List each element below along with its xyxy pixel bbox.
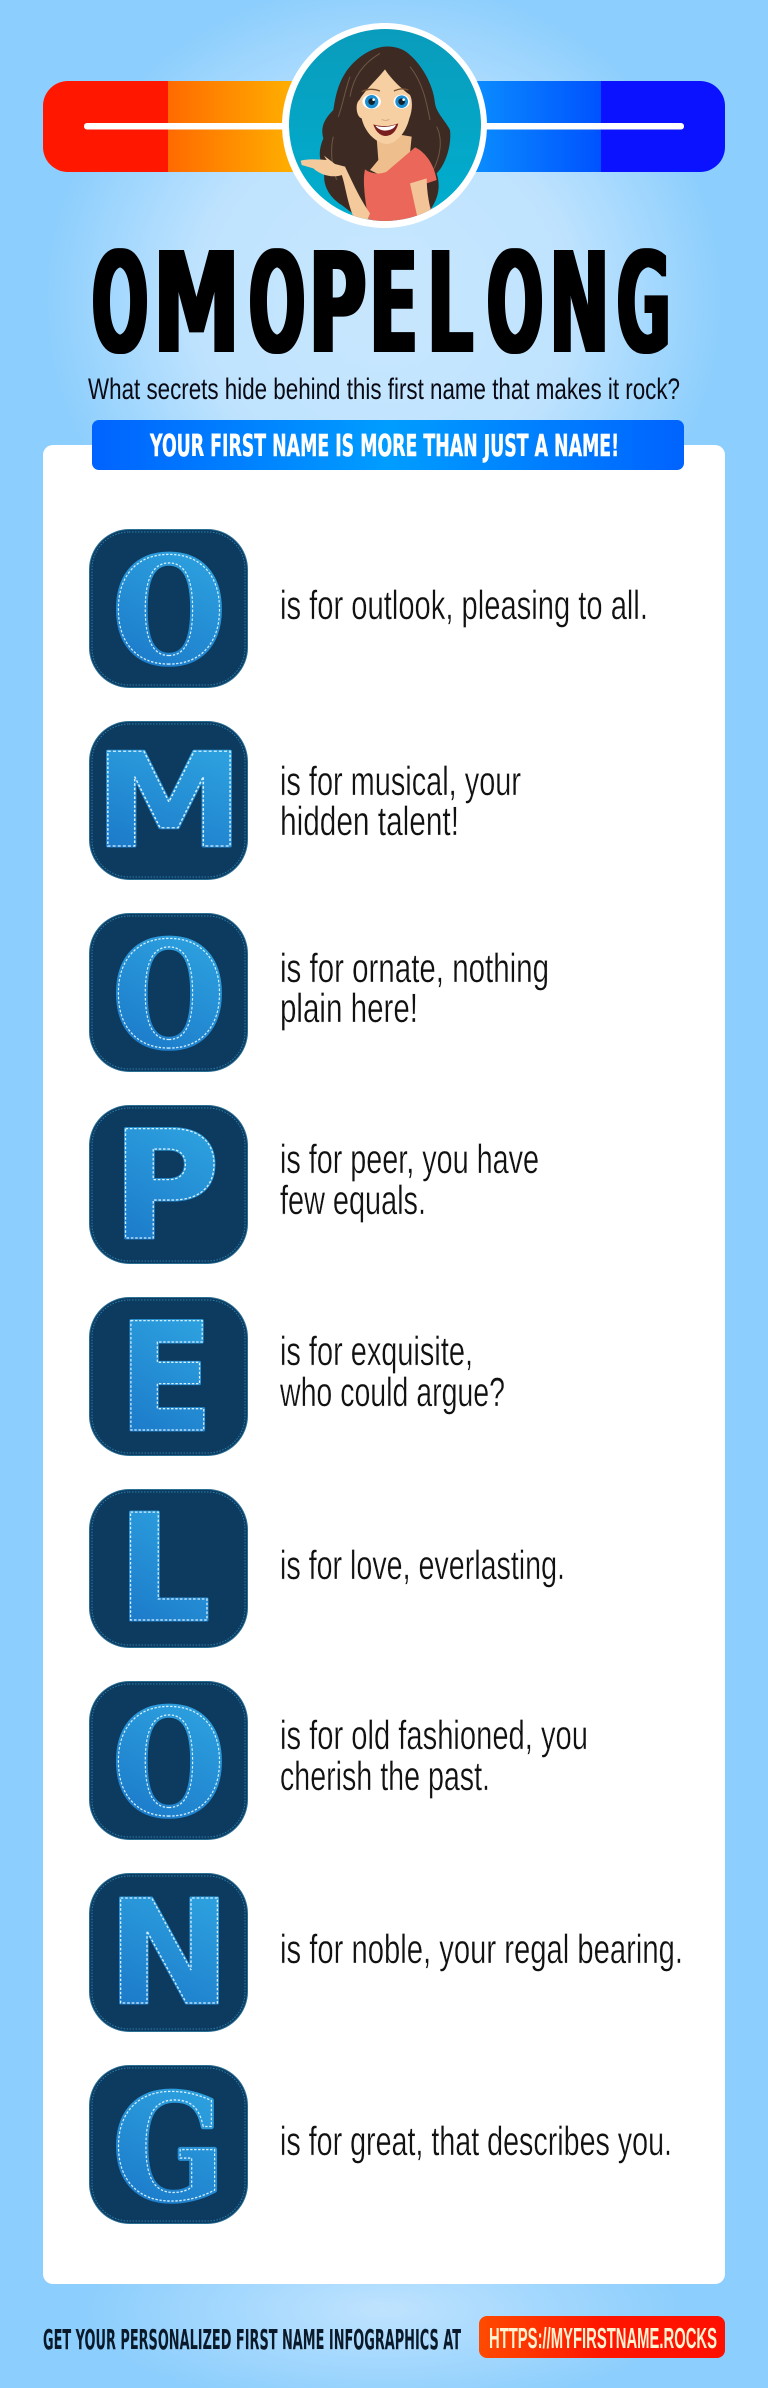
banner — [92, 420, 684, 470]
icon: letter L: L — [117, 1483, 211, 1655]
row: N noble — [90, 1869, 683, 2037]
row: O ornate: plain here! — [280, 985, 418, 1031]
row: O ornate: is for ornate, nothing — [280, 945, 549, 991]
row: P peer: is for peer, you have — [280, 1136, 539, 1182]
panel: white content card — [43, 445, 725, 2284]
row: O outlook — [90, 527, 648, 697]
title: P — [309, 223, 367, 386]
row: M musical: hidden talent! — [280, 798, 459, 844]
icon: letter P: P — [112, 1100, 220, 1274]
row: E exquisite — [90, 1292, 505, 1466]
icon: letter O: O — [113, 911, 225, 1081]
icon: letter P: P — [112, 1100, 220, 1274]
title: L — [427, 223, 473, 386]
row: L love — [90, 1483, 565, 1655]
row: E exquisite: who could argue? — [279, 1369, 505, 1415]
portrait medallion — [282, 23, 487, 228]
row: P peer: few equals. — [280, 1177, 426, 1223]
row: P peer — [90, 1100, 539, 1274]
title: M — [153, 223, 240, 386]
text: G — [617, 223, 671, 386]
title: N — [549, 223, 609, 386]
icon: letter E: E — [118, 1292, 214, 1466]
icon: letter M: M — [94, 725, 244, 877]
icon: letter E — [90, 1292, 248, 1466]
icon: letter O: O — [113, 527, 225, 697]
title: O — [249, 223, 305, 386]
icon: letter L: L — [117, 1483, 211, 1655]
row: L love: is for love, everlasting. — [280, 1542, 565, 1588]
icon: letter L — [90, 1483, 248, 1655]
title: O — [487, 223, 543, 386]
row: E exquisite: is for exquisite, — [280, 1328, 473, 1374]
icon: letter M: M — [94, 725, 244, 877]
row: M musical — [90, 722, 521, 880]
icon: letter G: G — [113, 2064, 225, 2234]
icon: letter G: G — [113, 2064, 225, 2234]
icon: letter O: O — [113, 1679, 225, 1849]
title: O — [92, 223, 148, 386]
title — [92, 223, 671, 386]
row: M musical: is for musical, your — [280, 758, 521, 804]
header colour bar — [43, 81, 725, 172]
icon: letter O: O — [113, 527, 225, 697]
icon: letter P — [90, 1100, 248, 1274]
row: G great — [90, 2064, 672, 2234]
footer link button — [479, 2316, 725, 2358]
row: O old fashioned: cherish the past. — [280, 1753, 490, 1799]
row: O ornate — [90, 911, 549, 1081]
row: O old fashioned: is for old fashioned, you — [280, 1712, 588, 1758]
icon: letter O: O — [113, 911, 225, 1081]
icon: letter E: E — [118, 1292, 214, 1466]
icon: letter N: N — [107, 1869, 231, 2037]
row: O old fashioned — [90, 1679, 588, 1849]
icon: letter N: N — [107, 1869, 231, 2037]
title: E — [369, 223, 418, 386]
icon: letter O: O — [113, 1679, 225, 1849]
